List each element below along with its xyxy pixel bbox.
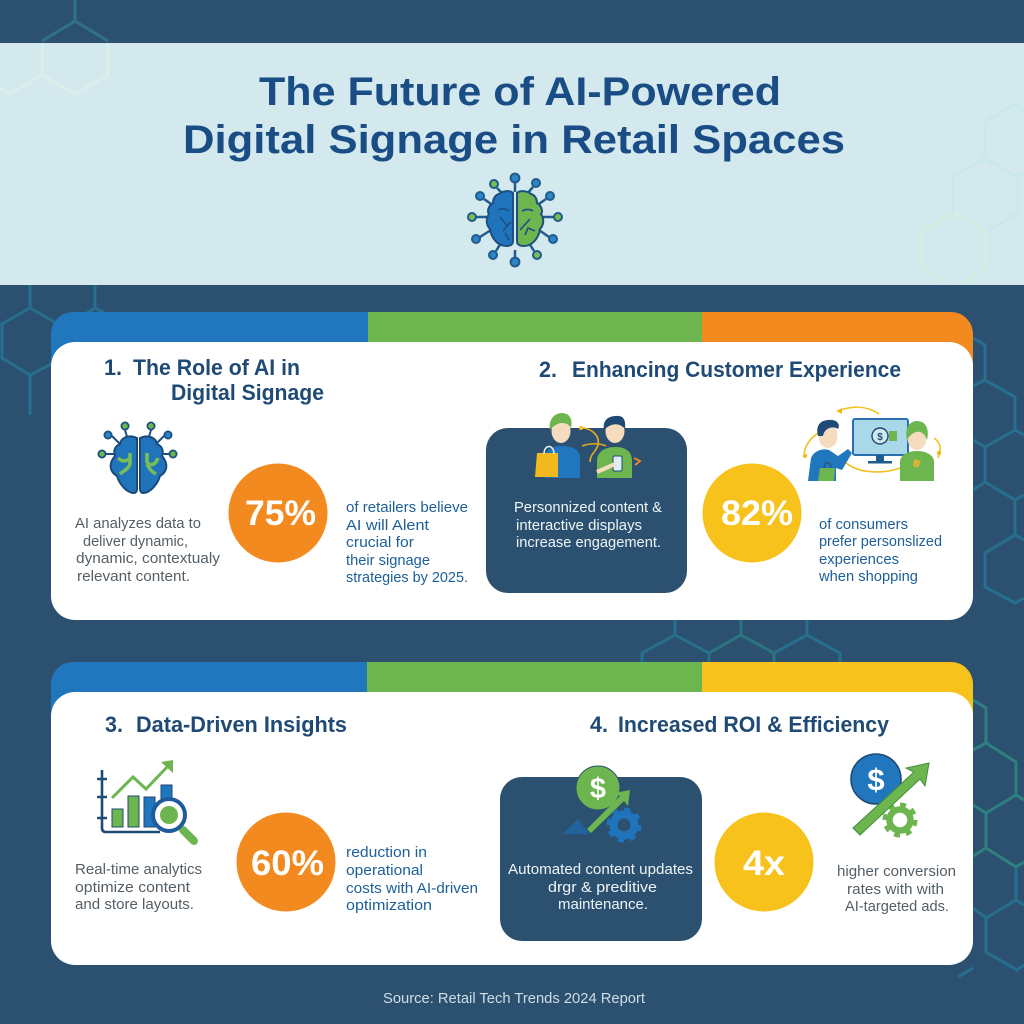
heading: section 4: 4. <box>590 712 608 737</box>
text: real-time analytics: and store layouts. <box>75 896 194 913</box>
text: retailers: AI will Alent <box>346 517 430 534</box>
panel: top card <box>51 312 973 620</box>
text: AI analyzes: deliver dynamic, <box>83 533 188 550</box>
text: reduction: operational <box>346 862 423 879</box>
stat: 4x <box>714 812 814 912</box>
text: real-time analytics: optimize content <box>75 879 191 896</box>
text: consumers: when shopping <box>818 568 918 585</box>
stat: 60%: 60% <box>251 844 324 883</box>
stat: 60% <box>236 812 336 912</box>
text: retailers: their signage <box>346 552 430 569</box>
text: personalized content: Personnized content & <box>514 499 662 516</box>
text: consumers: prefer personslized <box>819 533 942 550</box>
dark panel: automated content <box>500 777 702 941</box>
text: personalized content <box>514 499 662 551</box>
text: automated content: Automated content updates <box>508 861 693 878</box>
heading: section 3: Data-Driven Insights <box>136 712 347 737</box>
dark panel: personalized content <box>486 428 687 593</box>
text: AI analyzes: relevant content. <box>77 568 190 585</box>
heading: section 4: Increased ROI & Efficiency <box>618 712 890 737</box>
title: The Future of AI-Powered <box>259 70 781 114</box>
white card: bottom <box>51 692 973 965</box>
text: retailers: crucial for <box>346 534 414 551</box>
source note: Source: Retail Tech Trends 2024 Report <box>383 991 645 1007</box>
text: consumers: of consumers <box>819 516 908 533</box>
section 4 <box>500 712 956 941</box>
stat: 82% <box>702 464 802 562</box>
text: retailers: of retailers believe <box>346 499 468 516</box>
text: real-time analytics <box>75 861 202 913</box>
icon: shopper at smart display <box>803 407 941 481</box>
text: automated content <box>508 861 693 913</box>
stat: 75%: 75% <box>245 494 316 533</box>
text: retailers <box>346 499 468 586</box>
text: consumers: experiences <box>819 551 899 568</box>
header band <box>0 43 1024 285</box>
text: retailers: strategies by 2025. <box>346 569 468 586</box>
icon: chart with magnifier <box>97 760 194 841</box>
colour band: bottom card <box>51 662 973 750</box>
text: consumers <box>818 516 942 585</box>
panel: bottom card <box>51 662 973 965</box>
stat: 4x: 4x <box>743 844 786 883</box>
heading: section 1: 1. <box>104 355 122 380</box>
text: automated content: maintenance. <box>558 896 648 913</box>
icon: dollar, arrow and gear on panel <box>562 766 640 840</box>
icon: dollar, arrow and gear: $ <box>867 762 885 797</box>
title: Digital Signage in Retail Spaces <box>183 118 845 162</box>
colour band: top card <box>51 312 973 400</box>
stat: 82%: 82% <box>721 494 793 533</box>
text: conversion: rates with with <box>847 881 944 898</box>
text: reduction: costs with AI-driven <box>346 880 478 897</box>
text: conversion <box>837 863 956 915</box>
text: conversion: higher conversion <box>837 863 956 880</box>
heading: section 1 <box>104 355 324 405</box>
icon: dollar, arrow and gear <box>851 754 929 836</box>
heading: section 2: 2. <box>539 357 557 382</box>
text: AI analyzes: AI analyzes data to <box>75 515 201 532</box>
text: automated content: drgr & preditive <box>548 879 657 896</box>
heading: section 2: Enhancing Customer Experience <box>572 357 901 382</box>
icon: brain <box>98 422 177 493</box>
white card: top <box>51 342 973 620</box>
section 2 <box>486 357 942 593</box>
text: reduction <box>346 844 478 914</box>
heading: section 1: The Role of AI in <box>133 355 300 380</box>
section 1 <box>75 355 468 586</box>
icon: two shoppers <box>535 413 640 478</box>
icon: dollar, arrow and gear on panel: $ <box>590 773 606 805</box>
icon: shopper at smart display: $ <box>877 432 883 443</box>
text: AI analyzes: dynamic, contextualy <box>76 550 221 567</box>
text: personalized content: increase engagement. <box>516 534 661 551</box>
text: real-time analytics: Real-time analytics <box>75 861 202 878</box>
heading: section 1: Digital Signage <box>171 380 324 405</box>
text: reduction: reduction in <box>346 844 427 861</box>
text: conversion: AI-targeted ads. <box>845 898 949 915</box>
title <box>183 70 845 162</box>
stat: 75% <box>228 464 328 562</box>
text: personalized content: interactive displays <box>516 517 642 534</box>
text: AI analyzes <box>75 515 221 585</box>
text: reduction: optimization <box>346 897 432 914</box>
heading: section 3: 3. <box>105 712 123 737</box>
section 3 <box>75 712 478 914</box>
icon: header brain network <box>468 174 562 266</box>
